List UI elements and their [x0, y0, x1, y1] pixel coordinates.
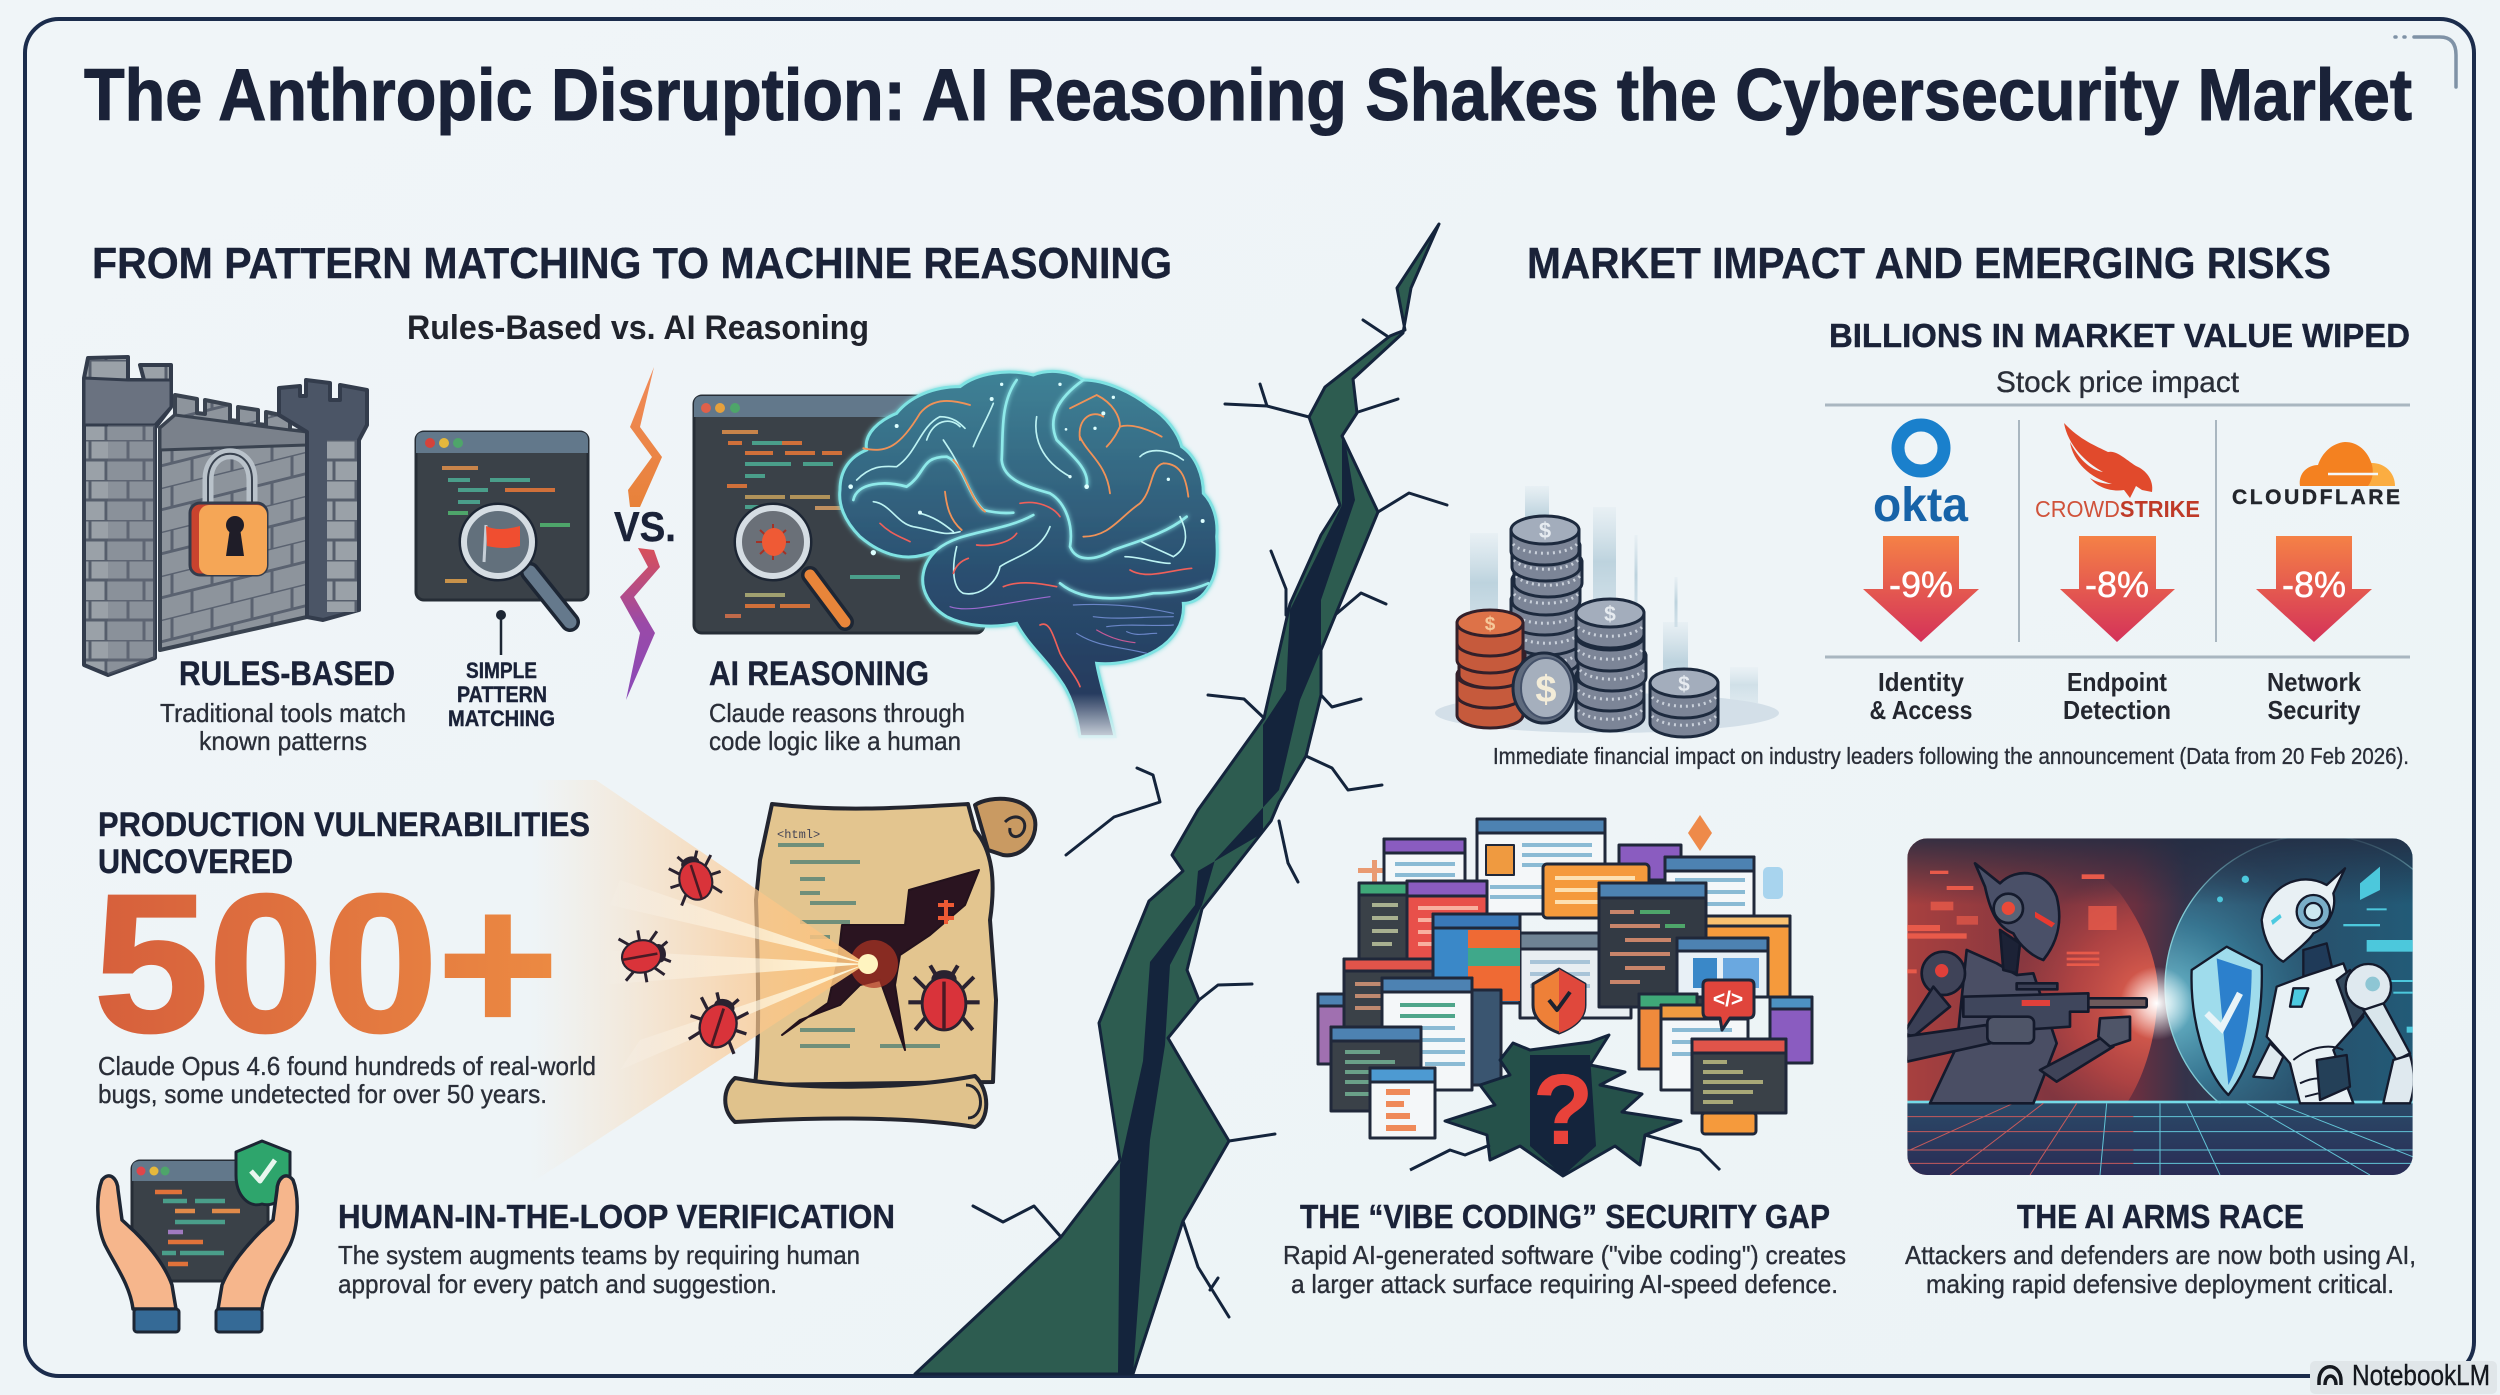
text block: human in the loop: approval for every patch and suggestion. [338, 1269, 777, 1299]
logo: okta: okta [1873, 479, 1968, 532]
logo: cloudflare [2232, 442, 2400, 509]
heading: PRODUCTION VULNERABILITIES [98, 806, 590, 844]
text block: rules-based: Traditional tools match [160, 698, 406, 728]
text block: vibe coding: THE “VIBE CODING” SECURITY GAP [1300, 1198, 1830, 1235]
text block: AI arms race [1905, 1198, 2416, 1299]
description [98, 1051, 596, 1109]
icon: coin stacks: $ [1485, 614, 1496, 635]
text block: vulnerabilities [94, 806, 596, 1109]
callout: simple pattern matching [448, 610, 555, 731]
icon: terminal with magnifier and flag [416, 432, 588, 622]
brain stem fade [1053, 693, 1123, 747]
icon: castle wall with padlock [84, 357, 367, 675]
callout: simple pattern matching: SIMPLE [466, 658, 537, 683]
code bubble: </> [1713, 988, 1743, 1011]
security hole [1410, 1035, 1720, 1176]
category labels: Detection [2063, 695, 2171, 725]
heading [98, 806, 590, 881]
category labels: Security [2268, 695, 2361, 725]
text block: vibe coding [1283, 1198, 1846, 1299]
crack depth [1118, 440, 1355, 1374]
icon: code scroll with bugs and beam [520, 780, 1035, 1190]
heading: UNCOVERED [98, 843, 293, 881]
icon: coin stacks: $ [1539, 518, 1551, 543]
logo: crowdstrike [2035, 423, 2200, 522]
floor grid [1907, 1101, 2413, 1175]
red energy dome [2030, 883, 2158, 1101]
scroll [725, 799, 1035, 1127]
text block: AI reasoning: AI REASONING [709, 655, 929, 693]
blue energy shield [2164, 838, 2413, 1105]
category labels [1870, 667, 2361, 725]
logo: okta [1873, 425, 1968, 532]
vs divider: VS. [614, 503, 676, 550]
text block: AI reasoning: code logic like a human [709, 726, 961, 756]
logo: crowdstrike: CROWDSTRIKE [2035, 496, 2200, 522]
image: AI arms race [1907, 838, 2413, 1175]
text block: human in the loop: The system augments teams by requiring human [338, 1240, 860, 1270]
central crack divider [915, 224, 1447, 1374]
caption: Immediate financial impact on industry leaders following the announcement (Data from 20 Feb 2026). [1493, 743, 2409, 769]
vs divider [614, 367, 676, 700]
bugs [662, 846, 727, 907]
window 8 [1599, 883, 1706, 1007]
arrow: cloudflare -8%: -8% [2282, 564, 2346, 605]
text block: AI reasoning [709, 655, 965, 756]
icon: glowing brain [840, 371, 1217, 747]
arrow: crowdstrike -8% [2060, 536, 2175, 642]
text block: human in the loop: HUMAN-IN-THE-LOOP VERIFICATION [338, 1198, 895, 1235]
bug on scroll [908, 966, 980, 1030]
window 21 [1692, 1039, 1786, 1113]
text block: AI arms race: THE AI ARMS RACE [2017, 1198, 2304, 1235]
corner accent [2395, 37, 2456, 87]
text block: vibe coding: a larger attack surface requiring AI-speed defence. [1291, 1269, 1838, 1299]
light beam [520, 780, 866, 1190]
arrow: crowdstrike -8%: -8% [2085, 564, 2149, 605]
scroll: <html> [777, 828, 820, 842]
icon: pile of code windows over a security hole [1318, 815, 1812, 1176]
code bubble [1703, 980, 1754, 1030]
crack body [915, 224, 1439, 1374]
arrow: cloudflare -8% [2256, 536, 2372, 642]
text block: AI reasoning: Claude reasons through [709, 698, 965, 728]
text block: AI arms race: Attackers and defenders are now both using AI, [1905, 1240, 2416, 1270]
arrow: okta -9%: -9% [1889, 564, 1953, 605]
category labels: & Access [1870, 695, 1972, 725]
category labels: Identity [1878, 667, 1964, 697]
icon: coin stacks: $ [1604, 603, 1616, 626]
arrow: okta -9% [1863, 536, 1979, 642]
flash [2120, 967, 2193, 1040]
description: Claude Opus 4.6 found hundreds of real-world [98, 1051, 596, 1081]
window 6 [1359, 883, 1409, 959]
text block: rules-based: known patterns [199, 726, 367, 756]
window 16 [1331, 1027, 1421, 1111]
text block: human in the loop [338, 1198, 895, 1299]
callout: simple pattern matching: MATCHING [448, 706, 555, 731]
heading: left section: FROM PATTERN MATCHING TO MACHINE REASONING [92, 239, 1172, 288]
padlock [190, 454, 267, 575]
logo: cloudflare: CLOUDFLARE [2232, 486, 2400, 509]
window 13 [1344, 959, 1433, 1028]
heading: right section: MARKET IMPACT AND EMERGING RISKS [1527, 239, 2331, 288]
text block: AI arms race: making rapid defensive deployment critical. [1926, 1269, 2394, 1299]
defender robot [2192, 868, 2414, 1103]
text block: vibe coding: Rapid AI-generated software ("vibe coding") creates [1283, 1240, 1846, 1270]
security hole: ? [1532, 1054, 1594, 1166]
panel: stock impact [1493, 317, 2410, 769]
subheading: comparison: Rules-Based vs. AI Reasoning [407, 309, 869, 347]
window 1 [1477, 819, 1605, 914]
hands [98, 1176, 176, 1309]
text block: rules-based [160, 655, 406, 756]
attacker robot [1903, 863, 2147, 1103]
subheading: Stock price impact [1996, 366, 2240, 399]
shield [236, 1141, 290, 1205]
icon: coin stacks: $ [1678, 673, 1690, 696]
icon: coin stacks: $ [1535, 669, 1557, 711]
description: bugs, some undetected for over 50 years. [98, 1079, 547, 1109]
icon: hands holding verified code [98, 1141, 297, 1332]
big number: 500+ [94, 854, 558, 1073]
category labels: Network [2267, 667, 2361, 697]
light rays [600, 880, 866, 1070]
scroll tear [782, 870, 979, 1050]
category labels: Endpoint [2067, 667, 2167, 697]
icon: AI terminal with magnifier [694, 396, 984, 633]
callout: simple pattern matching: PATTERN [457, 682, 547, 707]
heading: BILLIONS IN MARKET VALUE WIPED [1829, 317, 2410, 354]
shield [1533, 969, 1585, 1033]
icon: coin stacks [1435, 486, 1779, 737]
text block: rules-based: RULES-BASED [179, 655, 395, 693]
